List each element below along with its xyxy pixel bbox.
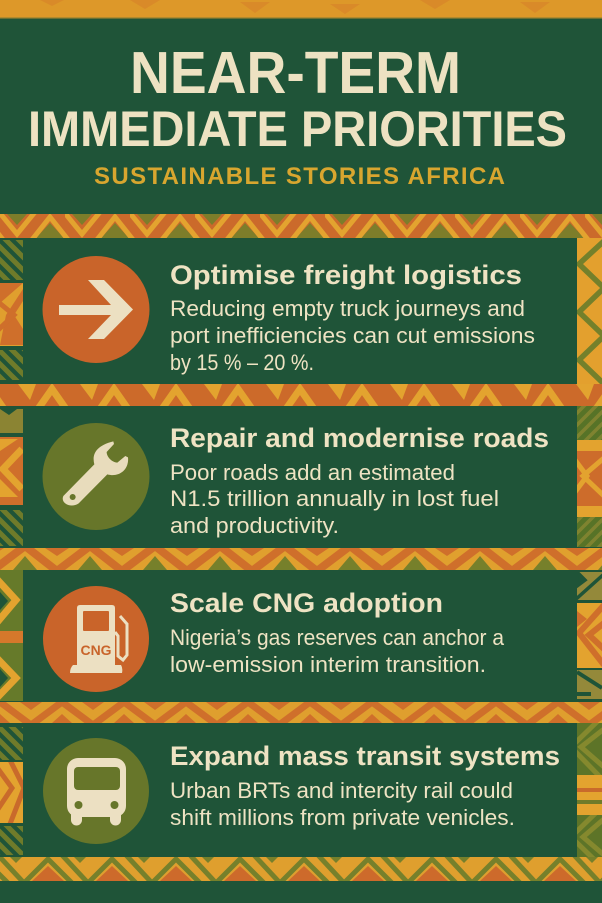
title line 1: NEAR-TERM xyxy=(130,40,461,106)
panel: expand mass transit systems xyxy=(23,723,577,857)
panel 2 text: and productivity. xyxy=(170,513,339,538)
icon: fuel pump: CNG xyxy=(80,642,112,658)
right side pattern column xyxy=(571,238,602,869)
panel 1 text: port inefficiencies can cut emissions xyxy=(170,323,535,348)
panel 1 text xyxy=(170,296,535,375)
panel 3 heading: Scale CNG adoption xyxy=(170,588,443,618)
panel 2 heading: Repair and modernise roads xyxy=(170,423,549,453)
panel 1 background xyxy=(23,238,577,384)
icon: bus xyxy=(43,738,149,844)
title xyxy=(28,40,567,157)
icon: arrow xyxy=(42,256,150,363)
panel 4 background xyxy=(23,723,577,857)
panel 1 text: Reducing empty truck journeys and xyxy=(170,296,525,321)
panel 4 text: shift millions from private venicles. xyxy=(170,805,515,830)
panel: optimise freight logistics xyxy=(23,238,577,384)
panel 3 text: low-emission interim transition. xyxy=(170,652,486,677)
title line 2: IMMEDIATE PRIORITIES xyxy=(28,101,567,157)
panel 1 text: by 15 % – 20 %. xyxy=(170,350,314,375)
panel 2 text: N1.5 trillion annually in lost fuel xyxy=(170,486,499,511)
panel 4 heading: Expand mass transit systems xyxy=(170,741,560,771)
top border band xyxy=(0,0,602,18)
panel: repair and modernise roads xyxy=(23,406,577,548)
pattern band 1 xyxy=(0,214,602,238)
icon: wrench xyxy=(42,423,150,530)
pattern band 5 xyxy=(0,857,602,881)
panel 3 text: Nigeria’s gas reserves can anchor a xyxy=(170,625,505,650)
panel 4 text: Urban BRTs and intercity rail could xyxy=(170,778,513,803)
icon: fuel pump xyxy=(43,586,149,692)
pattern band 3 xyxy=(0,548,602,570)
panel 2 text xyxy=(170,460,499,538)
subtitle: SUSTAINABLE STORIES AFRICA xyxy=(94,163,505,190)
panel 1 heading: Optimise freight logistics xyxy=(170,260,522,290)
pattern band 2 xyxy=(0,384,602,406)
left side pattern column xyxy=(0,240,24,855)
pattern band 4 xyxy=(0,702,602,723)
panel 4 text xyxy=(170,778,515,830)
panel 2 background xyxy=(23,406,577,548)
panel 3 background xyxy=(23,570,577,702)
panel: scale cng adoption xyxy=(23,570,577,702)
panel 3 text xyxy=(170,625,505,677)
panel 2 text: Poor roads add an estimated xyxy=(170,460,455,485)
